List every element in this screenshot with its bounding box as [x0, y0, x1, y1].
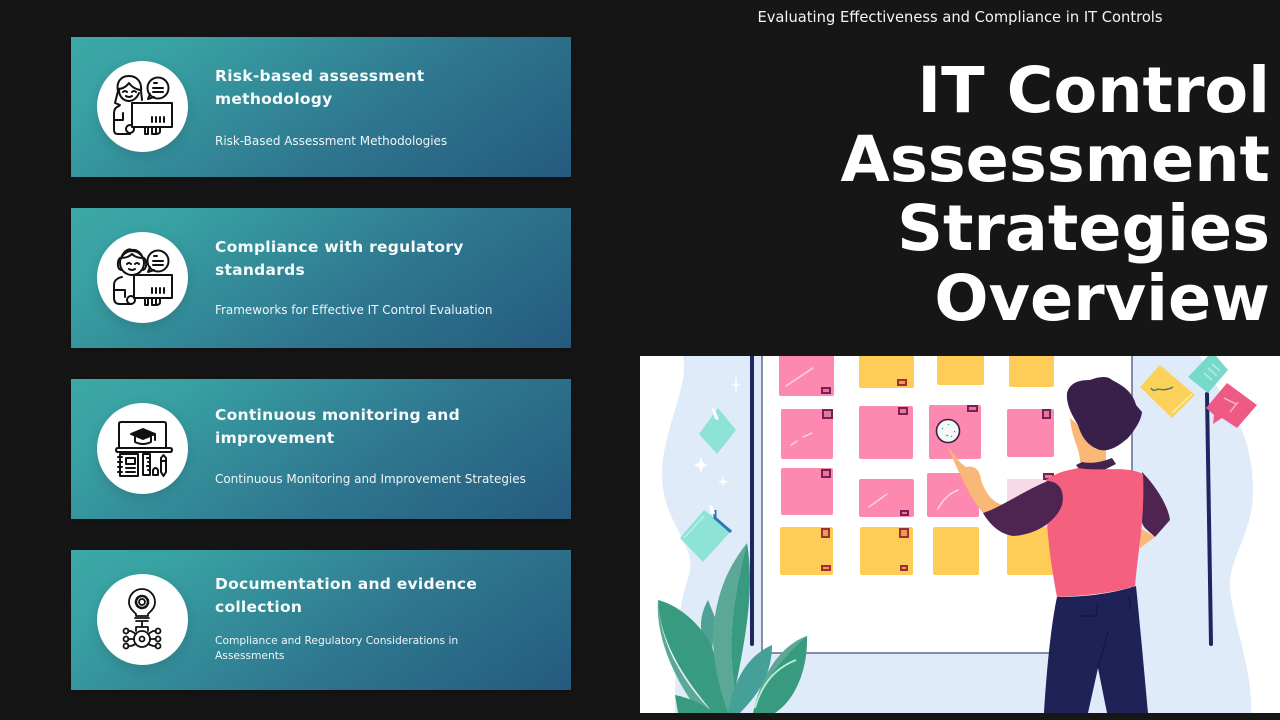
head and neck	[1070, 418, 1106, 472]
person	[947, 377, 1170, 713]
shirt	[1046, 468, 1143, 597]
heading	[215, 67, 424, 108]
panel: compliance card	[71, 208, 571, 348]
board posts	[752, 356, 1211, 644]
floating papers and sparkles	[680, 373, 742, 562]
pants	[1044, 586, 1148, 713]
heading	[215, 406, 460, 447]
icon: light bulb with gear and network nodes	[97, 574, 188, 665]
icon: person with headset at monitor	[97, 232, 188, 323]
illustration: person reviewing sticky notes on a board	[640, 356, 1280, 713]
title: IT Control	[917, 54, 1270, 128]
description: Frameworks for Effective IT Control Evaluation	[215, 303, 492, 317]
description: Risk-Based Assessment Methodologies	[215, 134, 447, 148]
title: Strategies	[897, 192, 1270, 266]
title: Assessment	[841, 123, 1270, 197]
panel: risk-based assessment card	[71, 37, 571, 177]
heading: Documentation and evidence	[215, 575, 477, 593]
panel: documentation card	[71, 550, 571, 690]
subtitle: Evaluating Effectiveness and Compliance in IT Controls	[757, 9, 1163, 26]
magnifier	[936, 420, 960, 442]
heading: collection	[215, 598, 302, 616]
collar	[1076, 458, 1116, 472]
heading: improvement	[215, 429, 334, 447]
description: Compliance and Regulatory Considerations in	[215, 634, 458, 647]
papers pinned upper right	[1140, 356, 1257, 428]
raised arm (skin)	[947, 446, 1006, 515]
board	[762, 350, 1132, 653]
description: Assessments	[215, 649, 284, 662]
hair	[1067, 377, 1142, 450]
title	[840, 54, 1270, 336]
description: Continuous Monitoring and Improvement Strategies	[215, 472, 526, 486]
heading: Continuous monitoring and	[215, 406, 460, 424]
raised sleeve	[983, 481, 1063, 536]
icon: laptop with graduation cap and stationery	[97, 403, 188, 494]
plant leaves	[658, 543, 807, 713]
sticky notes	[779, 350, 1054, 575]
background blob	[662, 356, 1253, 713]
panel: continuous monitoring card	[71, 379, 571, 519]
heading	[215, 238, 464, 279]
title: Overview	[934, 262, 1270, 336]
heading	[215, 575, 477, 616]
heading: methodology	[215, 90, 333, 108]
right sleeve	[1142, 472, 1170, 537]
heading: Risk-based assessment	[215, 67, 424, 85]
icon: person at monitor with speech bubble (girl)	[97, 61, 188, 152]
heading: standards	[215, 261, 305, 279]
heading: Compliance with regulatory	[215, 238, 464, 256]
description	[215, 634, 458, 662]
